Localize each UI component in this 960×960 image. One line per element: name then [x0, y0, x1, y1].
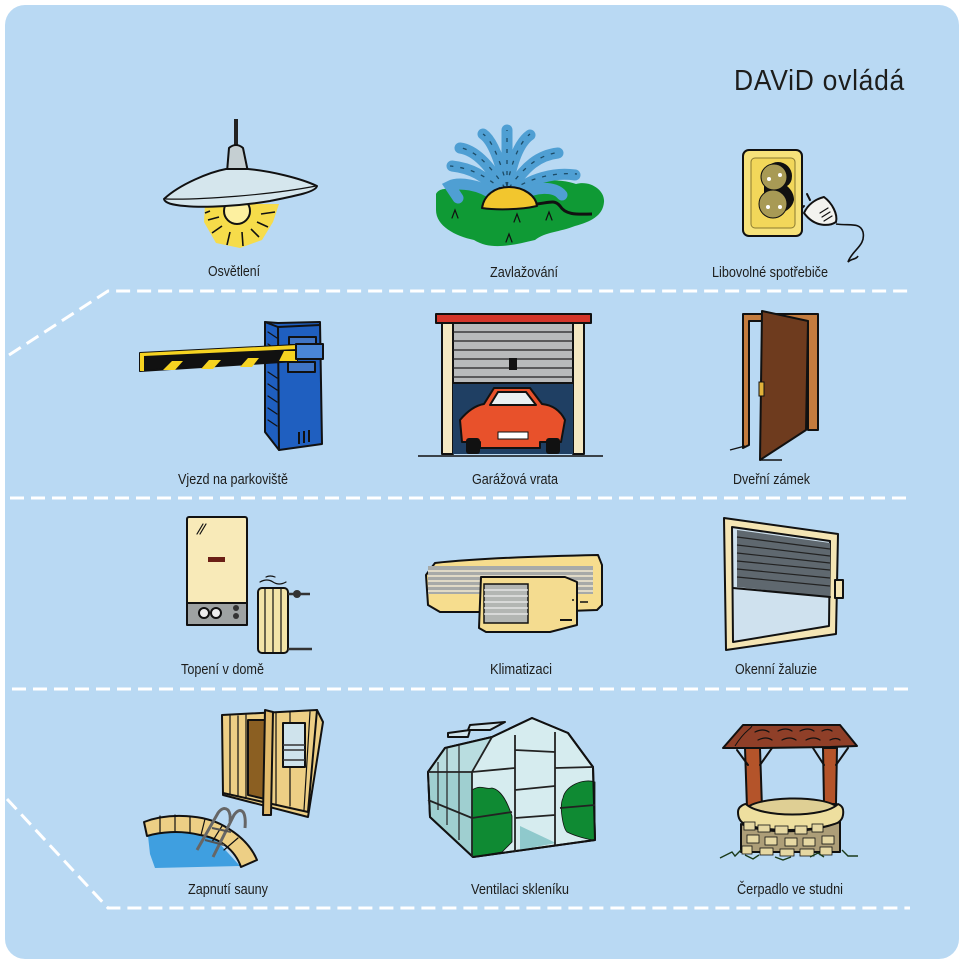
icon: door with lock [730, 311, 818, 460]
icon: wall socket with plug [743, 150, 863, 262]
label: Čerpadlo ve studni: Čerpadlo ve studni [737, 881, 843, 898]
label: Topení v domě: Topení v domě [181, 661, 264, 678]
icon: window blind [724, 518, 843, 650]
icon: sauna and pool [144, 710, 323, 868]
label: Garážová vrata: Garážová vrata [472, 471, 559, 488]
icon: parking barrier [140, 322, 323, 450]
icon: garage door with car [418, 314, 603, 456]
icon: ceiling lamp [164, 119, 317, 248]
label: Zapnutí sauny: Zapnutí sauny [188, 881, 268, 898]
label: Libovolné spotřebiče: Libovolné spotřebiče [712, 264, 828, 281]
icon: air conditioner [426, 555, 602, 632]
icon: greenhouse [428, 718, 595, 857]
label: Vjezd na parkoviště: Vjezd na parkoviště [178, 471, 288, 488]
label: Osvětlení: Osvětlení [208, 263, 261, 280]
label: Zavlažování: Zavlažování [490, 264, 559, 281]
icon: garden sprinkler [436, 130, 604, 246]
label: Dveřní zámek: Dveřní zámek [733, 471, 810, 488]
icon: boiler and radiator [187, 517, 312, 653]
label: Ventilaci skleníku: Ventilaci skleníku [471, 881, 569, 898]
title: DAViD ovládá [734, 65, 905, 97]
icon: well [720, 725, 858, 860]
label: Klimatizaci: Klimatizaci [490, 661, 552, 678]
label: Okenní žaluzie: Okenní žaluzie [735, 661, 817, 678]
